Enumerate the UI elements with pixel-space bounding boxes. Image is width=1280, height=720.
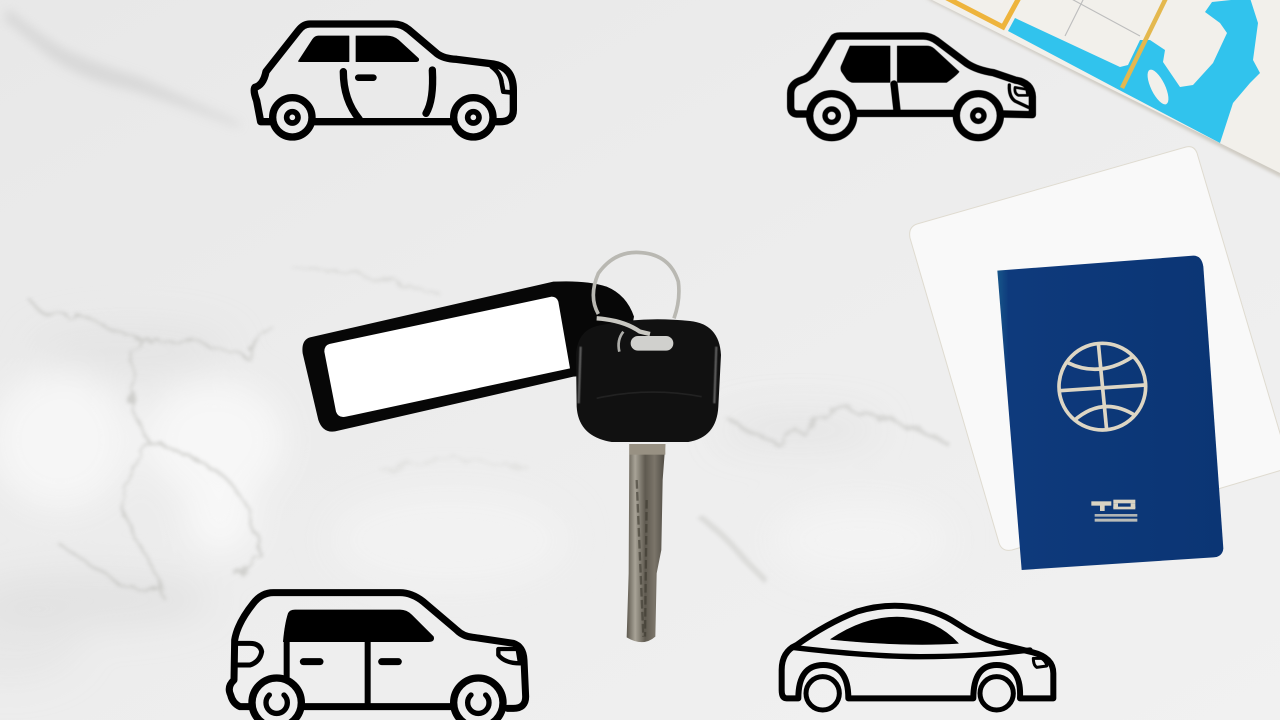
passport: [997, 256, 1223, 570]
white paper sheet: [910, 147, 1280, 550]
map: island: [1143, 67, 1173, 107]
icon: minivan car bottom left: [229, 593, 526, 720]
map: water: [1008, 0, 1260, 143]
key tag: [302, 281, 634, 432]
passport: globe emblem: [1059, 343, 1146, 430]
key ring: [593, 252, 679, 318]
map: roads: [943, 0, 1167, 88]
key blade: [627, 444, 665, 642]
icon: hatchback car top left: [254, 24, 513, 137]
icon: coupe car bottom right: [782, 606, 1053, 710]
icon: sedan car top right: [791, 36, 1032, 138]
travel map: [925, 0, 1280, 178]
key with tag and ring: [302, 252, 721, 642]
key head: [576, 318, 721, 442]
passport: small emblem mark: [1091, 500, 1137, 522]
